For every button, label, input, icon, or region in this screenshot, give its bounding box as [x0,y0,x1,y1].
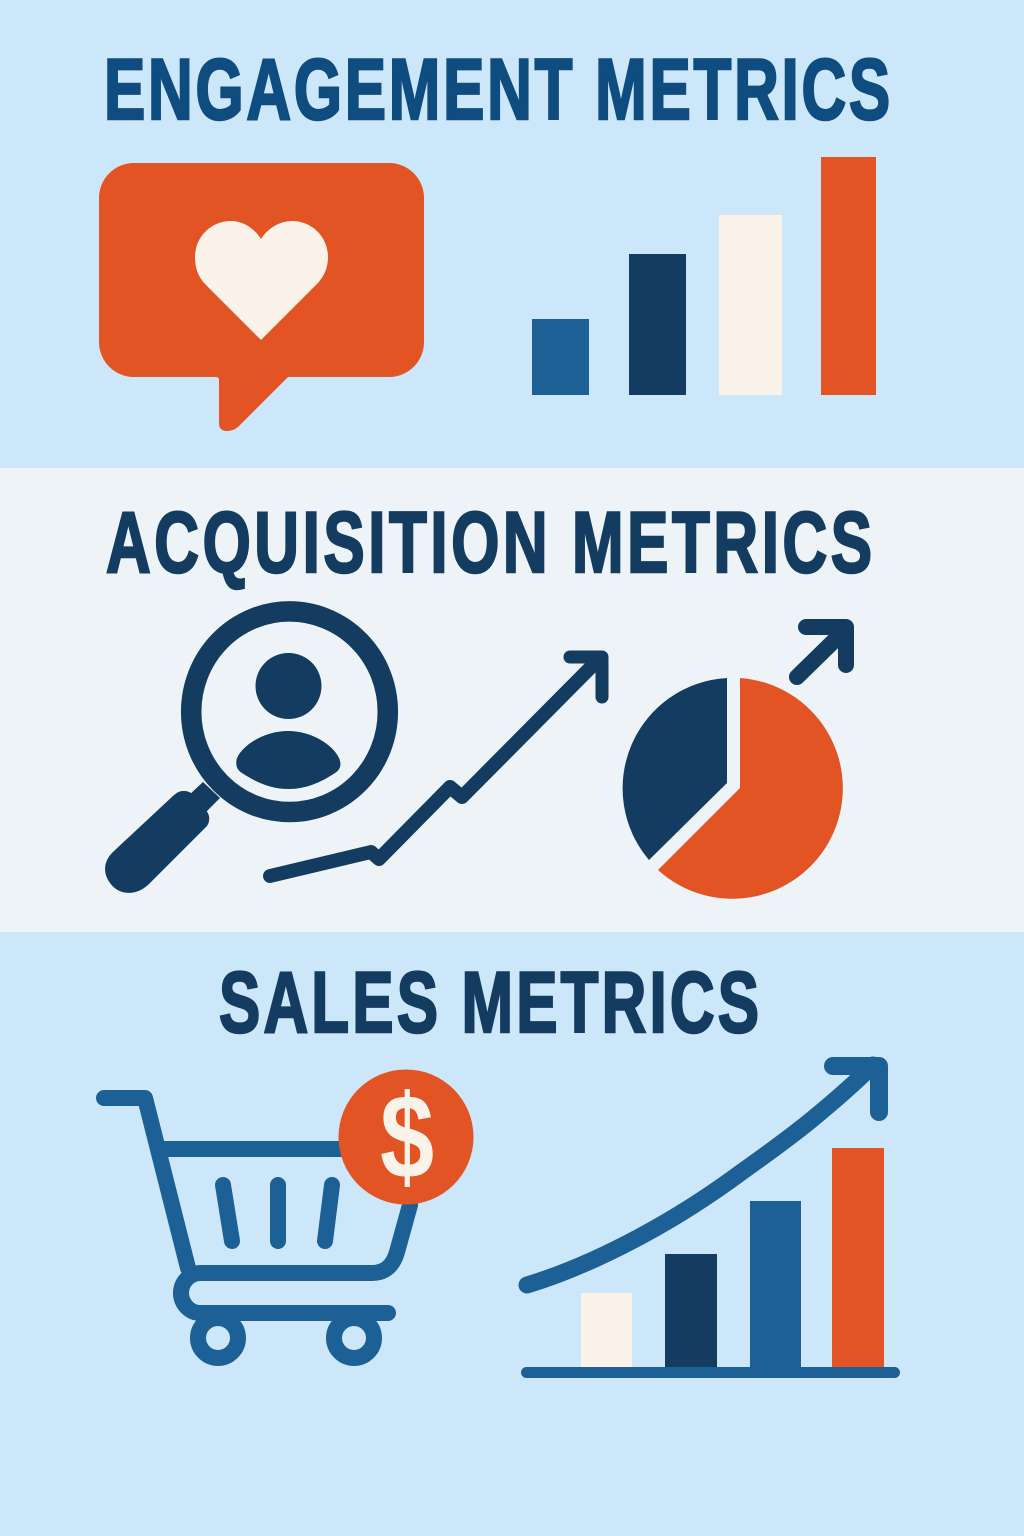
heading: engagement metrics: ENGAGEMENT METRICS [104,41,890,137]
panel: engagement metrics [0,0,1024,468]
icon: growth line arrow [270,657,602,876]
icon: speech bubble with heart [99,163,424,431]
panel: acquisition metrics [0,468,1024,932]
heading: sales metrics: SALES METRICS [219,954,759,1050]
heading: acquisition metrics: ACQUISITION METRICS [106,494,872,590]
bar chart: engagement growth [532,157,876,395]
bar chart: sales growth [521,1148,900,1378]
icon: heart [195,221,328,340]
icon: shopping cart [104,1070,474,1358]
icon: small up arrow [797,627,846,677]
pie chart [623,678,843,899]
icon: dollar badge: $ [380,1070,434,1204]
icon: magnifying glass with person [105,611,388,893]
panel: sales metrics [0,932,1024,1536]
icon: curved growth arrow [527,1065,879,1285]
icon: dollar badge [338,1070,474,1204]
